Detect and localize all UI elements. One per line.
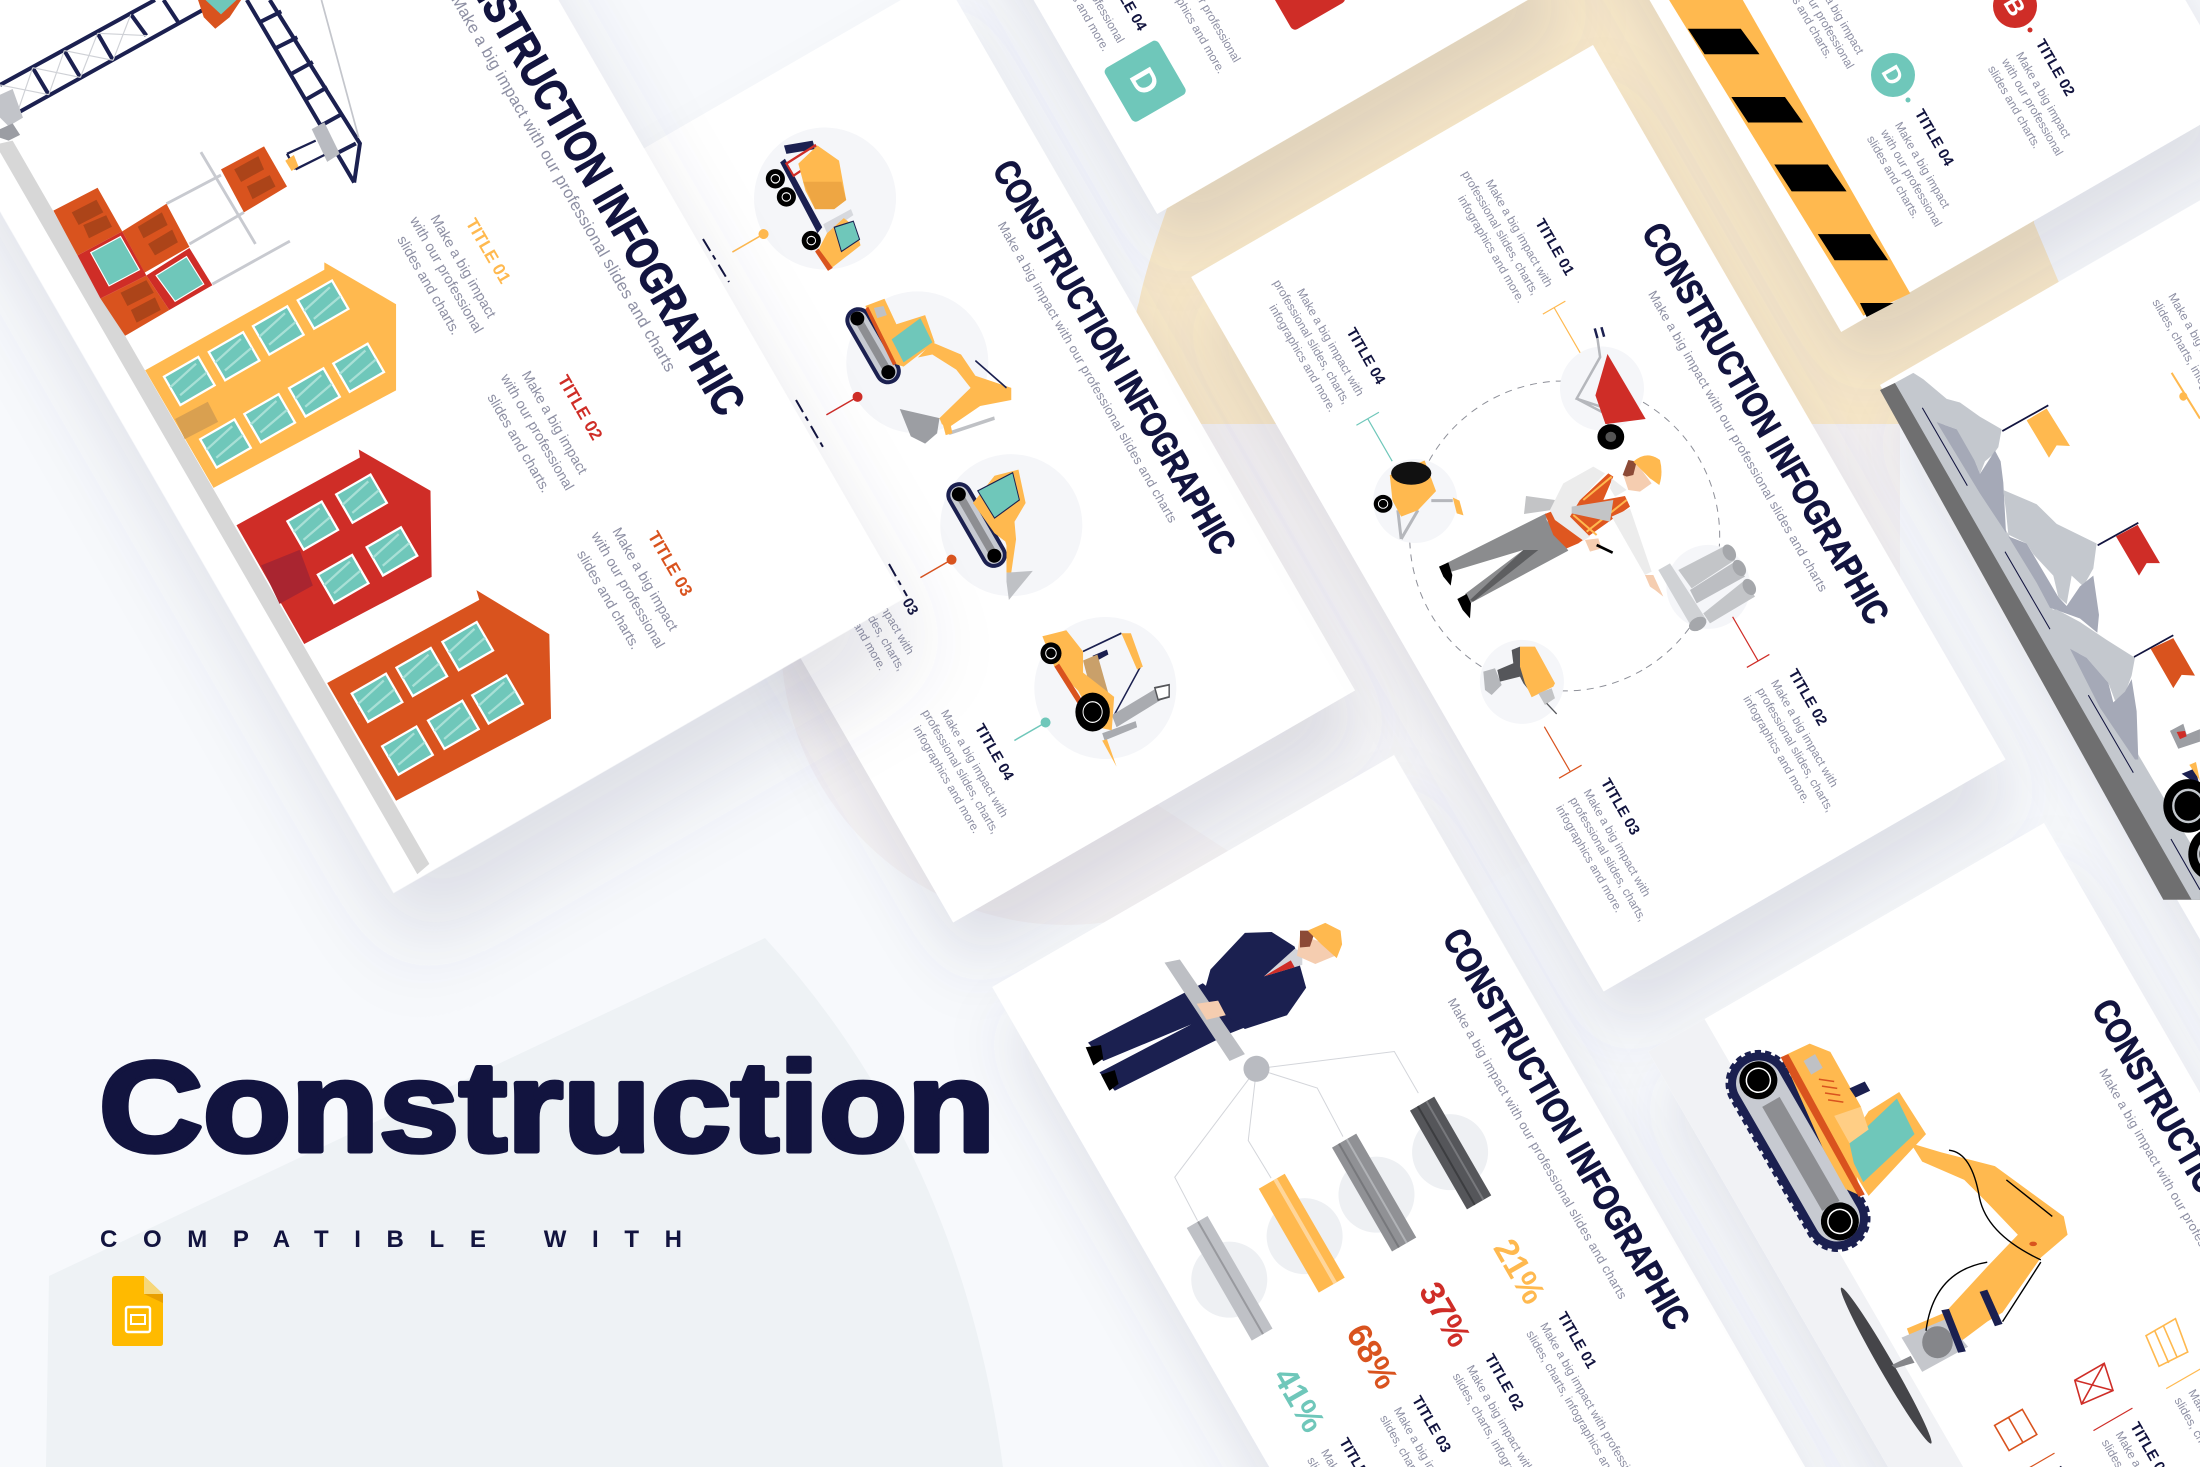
percent values: 21%	[1486, 1233, 1553, 1311]
text columns: Make a big impact	[609, 525, 681, 634]
text columns: TITLE 01	[462, 215, 515, 287]
text columns: professional slides, charts,	[825, 544, 908, 673]
text columns: infographics and more.	[1740, 693, 1813, 806]
circles behind icons	[1356, 331, 1772, 750]
subheading: COMPATIBLE WITH	[100, 1226, 682, 1253]
dashed ring	[1353, 324, 1776, 748]
text columns: infographics and more.	[1266, 302, 1339, 414]
text columns: TITLE 01	[1554, 1309, 1600, 1372]
text: slide top right columns: Make a big impact	[1892, 119, 1953, 211]
text columns: Make a big impact with	[656, 219, 729, 331]
excavator track	[1717, 1041, 1879, 1261]
text columns: infographics and more.	[722, 398, 795, 510]
background shape: pale circle	[781, 355, 1351, 925]
text columns: TITLE 04	[1343, 325, 1389, 388]
excavator	[865, 299, 1011, 444]
text columns: infographics and more.	[816, 560, 889, 673]
vehicle fragment	[2163, 724, 2200, 881]
text columns: TITLE 03	[644, 527, 697, 600]
subtitle: Make a big impact with our professional slides and charts	[447, 0, 679, 375]
icon: red letter square	[1262, 0, 1347, 32]
text: slide top right columns: slides and charts.	[1864, 133, 1923, 221]
text columns: with our professional	[496, 371, 577, 493]
material: grey beams	[1332, 1134, 1416, 1252]
ground strip	[0, 141, 429, 874]
boom and arm	[1907, 1143, 2068, 1370]
pin marker	[2172, 373, 2200, 419]
text columns: TITLE 01	[1531, 216, 1577, 278]
text columns: Make a big impact with	[844, 544, 917, 657]
text columns: professional slides, charts,	[1567, 794, 1649, 924]
text columns: TITLE 04	[971, 721, 1017, 784]
slide: worker	[1191, 45, 2006, 991]
text columns: TITLE 03	[1597, 775, 1643, 838]
text: slide top right columns: with our professional	[1998, 55, 2066, 158]
circles behind vehicles	[726, 102, 1204, 785]
text columns: Make a big impact with	[1581, 786, 1654, 899]
hoses	[1926, 1150, 2052, 1331]
text columns: TITLE 02	[1481, 1351, 1527, 1414]
percent values	[1265, 1233, 1553, 1439]
text: slide top right columns: with our professional	[1877, 126, 1945, 229]
text columns: Make a big impact	[518, 368, 590, 477]
slide: buildings	[0, 0, 904, 893]
icon: Google Slides	[112, 1276, 163, 1346]
background shape: bottom left	[46, 938, 1003, 1467]
text columns: professional slides, charts,	[731, 381, 814, 511]
text columns: professional slides, charts,	[1270, 277, 1353, 406]
scaffolding	[166, 152, 290, 284]
text columns: professional slides, charts,	[637, 218, 720, 348]
title: CONSTRUCTION INFOGRAPHIC	[1634, 216, 1898, 631]
mountains	[1913, 373, 2138, 759]
text columns: Make a big impact with	[1483, 177, 1556, 289]
text columns	[623, 198, 1037, 844]
building: orange	[327, 590, 551, 801]
text columns: professional slides, charts,	[919, 707, 1002, 836]
mixer truck	[766, 141, 861, 271]
text columns: slides and charts.	[573, 548, 643, 652]
material: yellow planks	[1259, 1174, 1345, 1293]
side strip	[1648, 1019, 2117, 1467]
illustration: worker, pipes, drill	[1439, 455, 1759, 714]
material: silver beams	[1187, 1216, 1273, 1341]
excavator track	[841, 302, 906, 389]
background shape: beige band	[1135, 0, 2060, 424]
main heading: Construction	[99, 1036, 995, 1179]
figure: businessman	[1086, 923, 1342, 1091]
text columns: Make a big impact with	[1294, 286, 1367, 398]
text columns: TITLE 03	[1408, 1393, 1454, 1456]
road marks	[1922, 408, 2200, 890]
subtitle: Make a big impact with our professional slides and charts	[995, 219, 1180, 526]
icon: teal letter D square: D	[1122, 62, 1167, 102]
circles behind materials	[1177, 1100, 1502, 1332]
crane	[0, 0, 360, 183]
icon: red badge B	[1993, 0, 2037, 32]
markers	[730, 227, 1052, 745]
dashes along slide edge	[703, 239, 907, 596]
text columns: TITLE 02	[1784, 666, 1830, 729]
slide: excavator	[1648, 823, 2200, 1467]
bulldozer track	[942, 477, 1012, 573]
breaker	[1892, 1290, 2003, 1372]
title: CONSTRUCTION INFOGRAPHIC	[985, 153, 1244, 561]
background shape: pale lower area	[1150, 424, 1900, 950]
forklift	[1040, 630, 1169, 767]
text columns: infographics and more.	[910, 723, 983, 836]
text: slide top right columns: TITLE 02	[2032, 36, 2078, 99]
text columns: slides and charts.	[484, 391, 553, 496]
icons: line outlines	[1994, 1319, 2193, 1454]
text columns	[2021, 1377, 2200, 1467]
text columns: Make a big impact with	[750, 382, 823, 494]
illustration: vehicles	[766, 141, 1169, 767]
ground disc	[1835, 1284, 1937, 1447]
text columns	[1255, 148, 1875, 932]
text: title 04 block	[1045, 0, 1150, 54]
text columns	[393, 212, 697, 652]
text: slide top right columns: slides and charts.	[1985, 63, 2044, 151]
text: slide top right columns: TITLE 04	[1911, 106, 1957, 170]
flags	[2002, 405, 2195, 688]
slide: construction vehicles	[541, 0, 1355, 922]
node	[1239, 1051, 1274, 1087]
slide: businessman	[992, 755, 1806, 1467]
cement mixer	[1374, 460, 1463, 539]
building: yellow	[145, 262, 396, 488]
illustration: excavator	[1781, 1044, 2068, 1372]
subtitle: Make a big impact with our professional slides and charts	[1645, 288, 1831, 595]
slide: top right hazard stripe	[1429, 0, 2200, 332]
bulldozer	[973, 470, 1033, 600]
text columns: 03	[898, 595, 922, 618]
subtitle: Make a big impact with our professional slides and charts	[1445, 995, 1630, 1302]
text columns: infographics and more.	[628, 235, 701, 347]
slide: top centre letters	[745, 0, 1559, 214]
text columns: professional slides, charts,	[1459, 168, 1542, 297]
text columns: slides and charts.	[393, 233, 463, 338]
title: CONSTRUCTION INFOGRAPHIC	[1435, 921, 1698, 1337]
road	[1880, 383, 2200, 900]
text: slide top right columns: Make a big impact	[2013, 49, 2074, 141]
body	[1781, 1044, 1870, 1197]
lines with end caps	[1354, 301, 1770, 778]
divider lines	[2016, 1366, 2200, 1467]
text columns: TITLE 02	[554, 371, 607, 443]
percent values: 41%	[1265, 1361, 1332, 1439]
cab	[1842, 1092, 1926, 1196]
slide: mountains	[1880, 85, 2200, 1251]
text columns: Make a big impact with	[1768, 677, 1841, 790]
connections	[1147, 1005, 1418, 1221]
text columns: with our professional	[587, 529, 667, 651]
icon: teal badge D: D	[1875, 61, 1909, 90]
building blocks	[53, 146, 287, 336]
icons: wheelbarrow and mixer	[1374, 327, 1646, 539]
wheelbarrow	[1577, 327, 1646, 450]
hazard stripe	[1669, 0, 1910, 317]
icon: teal badge D	[1871, 53, 1915, 102]
text columns: with our professional	[406, 213, 486, 336]
text columns: Make a big impact	[427, 212, 499, 321]
material: dark beams	[1410, 1097, 1491, 1209]
text columns: professional slides, charts,	[1754, 685, 1837, 814]
icon: teal letter D square	[1103, 39, 1188, 124]
percent values: 37%	[1411, 1276, 1478, 1354]
percent values: 68%	[1338, 1318, 1405, 1396]
text: slide top right columns	[1777, 0, 2078, 229]
text columns: Make a big impact with	[938, 707, 1011, 820]
text columns: infographics and more.	[1553, 802, 1626, 915]
text columns: infographics and more.	[1455, 193, 1528, 305]
building: red	[236, 449, 432, 644]
text columns	[1304, 1309, 1668, 1467]
